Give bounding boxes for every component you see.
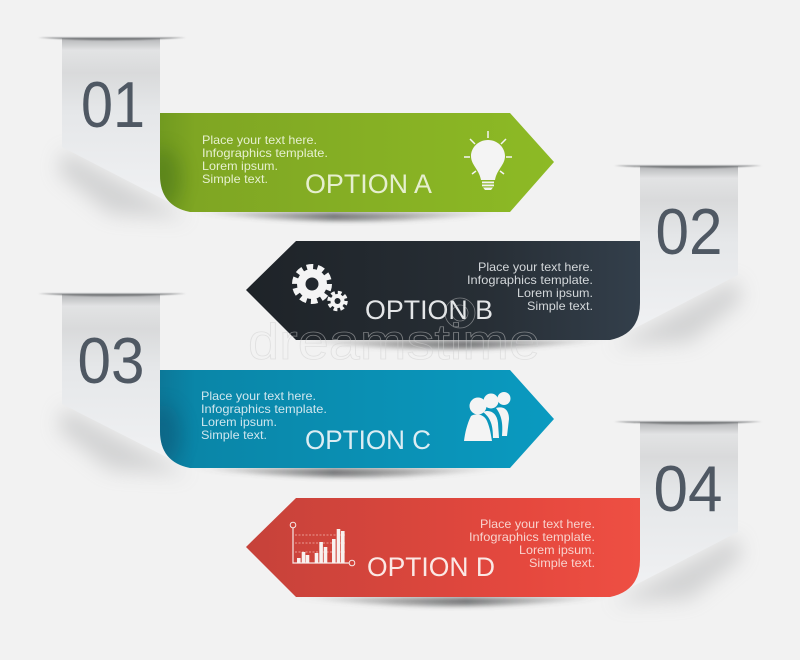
watermark xyxy=(248,298,540,370)
text block D: Simple text. xyxy=(529,556,595,570)
text block B: Place your text here. xyxy=(478,260,593,274)
text block D: Place your text here. xyxy=(480,517,595,531)
panel: option C xyxy=(38,294,554,477)
watermark: dreamstime xyxy=(248,314,540,370)
text block A: Infographics template. xyxy=(202,146,328,160)
ribbon 01 xyxy=(62,38,188,212)
icon: light bulb xyxy=(464,131,512,190)
text block A: Place your text here. xyxy=(202,133,317,147)
ribbon 02 xyxy=(612,166,738,340)
blue arrow banner xyxy=(160,370,554,468)
icon: people xyxy=(464,392,510,441)
heading OPTION D: OPTION D xyxy=(367,552,495,582)
text block D: Lorem ipsum. xyxy=(519,543,595,557)
text block B: Infographics template. xyxy=(467,273,593,287)
text block C: Infographics template. xyxy=(201,402,327,416)
green arrow banner xyxy=(160,113,554,212)
text block D: Infographics template. xyxy=(469,530,595,544)
red arrow banner xyxy=(246,498,640,597)
ribbon 03 xyxy=(62,294,188,468)
icon: bar chart xyxy=(290,522,355,566)
text block B: Simple text. xyxy=(527,299,593,313)
text block A: Lorem ipsum. xyxy=(202,159,278,173)
text block C: Place your text here. xyxy=(201,389,316,403)
heading OPTION C: OPTION C xyxy=(305,425,431,455)
text block A xyxy=(202,133,328,186)
panel: option A xyxy=(38,38,554,221)
text block A: Simple text. xyxy=(202,172,268,186)
icon: gears xyxy=(295,267,346,310)
number 01: 01 xyxy=(81,68,145,141)
number 02: 02 xyxy=(656,195,722,268)
text block C: Simple text. xyxy=(201,428,267,442)
panel: option D xyxy=(246,422,762,606)
text block D xyxy=(469,517,595,570)
panel: option B xyxy=(246,166,762,349)
heading OPTION B: OPTION B xyxy=(365,295,493,325)
heading OPTION A: OPTION A xyxy=(305,169,432,199)
dark arrow banner xyxy=(246,241,640,340)
text block C xyxy=(201,389,327,442)
ribbon 04 xyxy=(612,422,738,597)
text block C: Lorem ipsum. xyxy=(201,415,277,429)
text block B xyxy=(467,260,593,313)
number 03: 03 xyxy=(78,324,144,397)
text block B: Lorem ipsum. xyxy=(517,286,593,300)
number 04: 04 xyxy=(654,452,722,525)
